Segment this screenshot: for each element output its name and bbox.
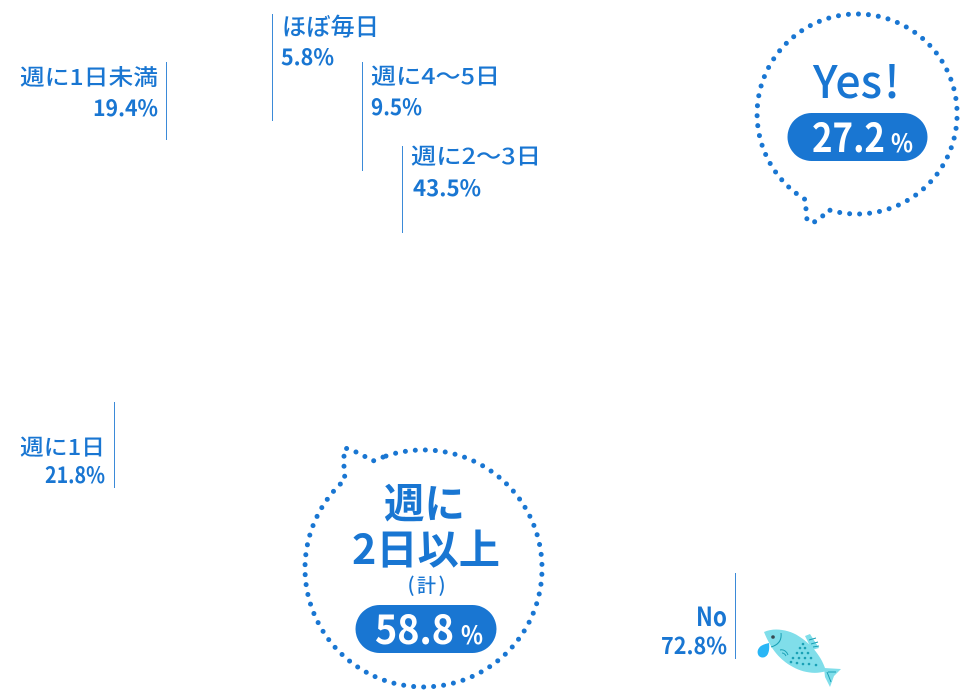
fish fin bbox=[805, 634, 819, 650]
fish eye bbox=[771, 635, 775, 639]
exclamation mark: ! bbox=[884, 46, 900, 111]
heading: 週に: 週に bbox=[384, 470, 465, 530]
label: 2 to 3 days a week bbox=[402, 139, 541, 233]
note: total: 計 bbox=[417, 571, 436, 598]
value: 27.2: 27.2 bbox=[812, 106, 885, 164]
fish tail bbox=[824, 668, 841, 687]
label: No: No bbox=[696, 597, 727, 634]
label: almost every day bbox=[272, 7, 379, 121]
label: once a week: 21.8% bbox=[45, 458, 105, 490]
label: less than once a week bbox=[20, 60, 166, 140]
pill: 27.2% bbox=[788, 113, 928, 161]
pill: 58.8% bbox=[356, 605, 496, 653]
value: 58.8: 58.8 bbox=[375, 598, 454, 656]
fin stripes bbox=[809, 638, 836, 682]
heading: Yes: Yes bbox=[812, 46, 882, 111]
label: 2 to 3 days a week: 43.5% bbox=[413, 171, 481, 203]
label: once a week: 週に1日 bbox=[20, 430, 105, 462]
fish scales bbox=[790, 643, 817, 666]
dotted speech bubble: Yes bbox=[757, 14, 957, 223]
note: total: ) bbox=[438, 569, 446, 598]
label: once a week bbox=[20, 402, 114, 490]
label: No bbox=[661, 573, 736, 661]
note: total bbox=[407, 569, 446, 598]
label: less than once a week: 19.4% bbox=[93, 91, 158, 123]
label: No: 72.8% bbox=[661, 627, 727, 661]
label: 4 to 5 days a week: 9.5% bbox=[371, 90, 422, 122]
percent sign: % bbox=[891, 124, 913, 160]
fish gill bbox=[771, 633, 781, 647]
note: total: ( bbox=[407, 569, 415, 598]
icon: crying fish bbox=[758, 630, 841, 687]
teardrop bbox=[758, 643, 769, 658]
callout: 2 or more days a week 58.8% bbox=[305, 448, 542, 687]
fish body bbox=[764, 630, 826, 673]
label: 4 to 5 days a week: 週に4～5日 bbox=[371, 59, 500, 91]
label: 4 to 5 days a week bbox=[362, 59, 500, 171]
label: almost every day: 5.8% bbox=[281, 40, 334, 72]
label: 2 to 3 days a week: 週に2～3日 bbox=[411, 139, 541, 171]
label: almost every day: ほぼ毎日 bbox=[282, 7, 379, 42]
callout: Yes 27.2% bbox=[757, 14, 957, 223]
percent sign: % bbox=[461, 616, 483, 652]
label: less than once a week: 週に1日未満 bbox=[20, 60, 158, 92]
heading: 2日以上: 2日以上 bbox=[352, 516, 500, 576]
dotted speech bubble: two or more days bbox=[305, 448, 542, 687]
